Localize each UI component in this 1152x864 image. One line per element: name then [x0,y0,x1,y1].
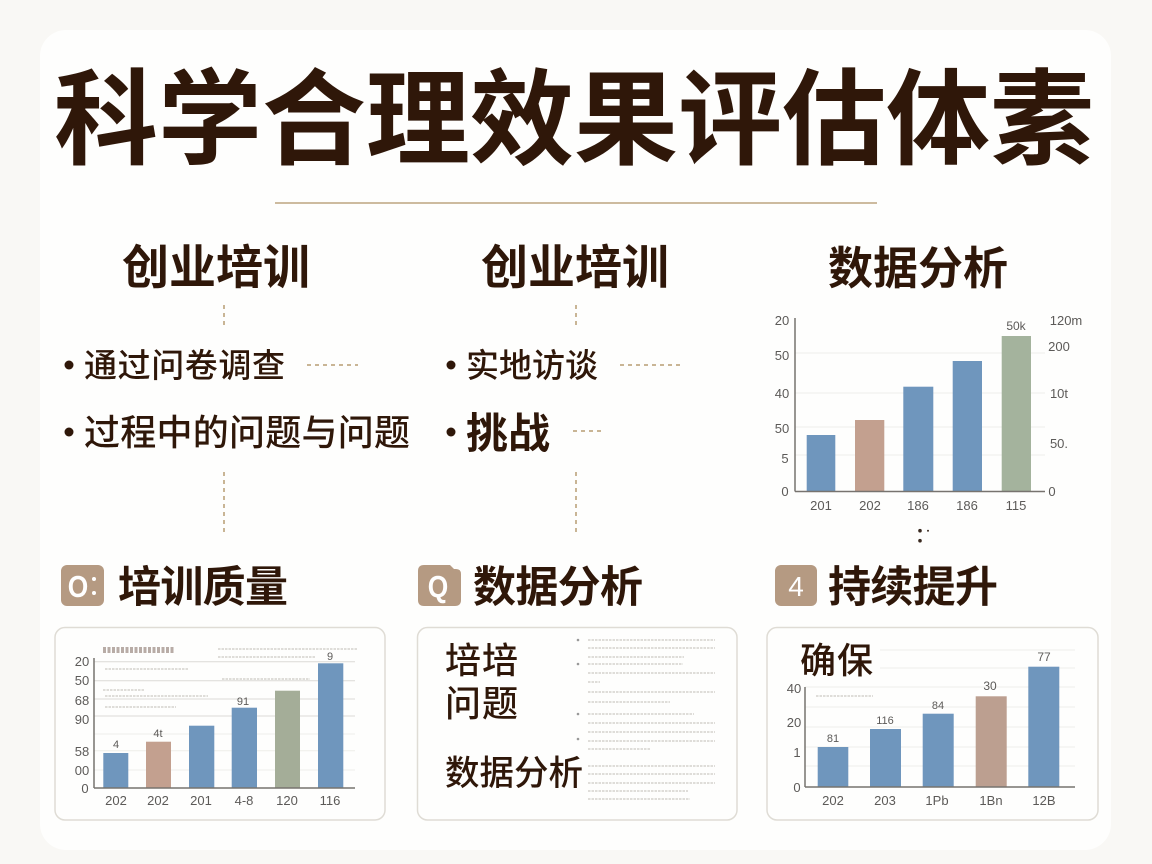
panel: training quality chart: 90 [75,712,89,727]
illegible microtext column [577,639,715,799]
panel: training quality chart: 202 [147,793,169,808]
chart: data analysis bar chart: 50 [775,348,789,363]
panel: data analysis text card: 数据分析 [445,745,583,795]
panel: data analysis text card: 问题 [445,675,518,727]
panel: training quality chart: 202 [105,793,127,808]
panel: continuous improvement chart: 确保 [800,632,873,684]
panel: training quality chart: 50 [75,673,89,688]
section heading: continuous improvement: 4 [788,571,804,602]
panel: continuous improvement chart: 1Pb [925,793,949,808]
bullet: process problems: 过程中的问题与问题 [84,404,410,456]
panel: column 2 heading: 创业培训 [481,229,669,298]
panel: continuous improvement chart: 202 [822,793,844,808]
panel: data analysis text card [418,628,737,820]
chart: data analysis bar chart: 20 [775,313,789,328]
section heading: continuous improvement: 持续提升 [828,553,998,615]
panel: training quality chart: 00 [75,763,89,778]
panel: data analysis text card: 培培 [445,632,518,684]
chart: data analysis bar chart: 50. [1050,436,1068,451]
panel: training quality chart: 4 [113,739,119,751]
bullet: challenge: 挑战 [466,400,550,461]
chart: data analysis bar chart: 40 [775,386,789,401]
section heading: data analysis: 数据分析 [473,553,643,615]
section heading: training quality: O [68,570,88,605]
chart: data analysis bar chart: 200 [1048,339,1070,354]
chart: data analysis bar chart: 120m [1050,313,1082,328]
panel: column 3 heading: 数据分析 [828,232,1008,297]
panel: column 1 heading: 创业培训 [122,229,310,298]
panel: training quality chart: 0 [81,781,89,796]
chart: data analysis bar chart: 115 [1006,498,1026,513]
panel: continuous improvement chart: 77 [1037,650,1051,664]
panel: training quality chart: 201 [190,793,212,808]
chart: data analysis bar chart: 186 [956,498,978,513]
chart: data analysis bar chart: 202 [859,498,881,513]
title: 科学合理效果评估体素 [54,35,1094,186]
section heading: training quality: 培训质量 [118,553,288,615]
panel: continuous improvement chart: 0 [793,780,801,795]
chart: data analysis bar chart: 0 [781,484,789,499]
chart: data analysis bar chart: 0 [1048,484,1056,499]
panel: continuous improvement chart: 40 [787,681,801,696]
chart: data analysis bar chart: 186 [907,498,929,513]
chart: data analysis bar chart: 201 [810,498,832,513]
panel: training quality chart: 68 [75,693,89,708]
chart: data analysis bar chart: 50k [1006,319,1027,333]
panel: training quality chart: 4-8 [235,793,253,808]
panel: continuous improvement chart: 203 [874,793,896,808]
panel: continuous improvement chart: 12B [1032,793,1056,808]
chart: data analysis bar chart: 5 [781,451,789,466]
panel: training quality chart: 9 [327,651,333,663]
panel: continuous improvement chart: 30 [983,679,997,693]
panel: training quality chart: 120 [276,793,298,808]
chart: data analysis bar chart [775,313,1082,513]
panel: continuous improvement chart [767,628,1098,820]
chart: data analysis bar chart: 10t [1050,386,1068,401]
panel: continuous improvement chart: 81 [827,733,839,745]
panel: continuous improvement chart: 116 [876,715,894,727]
panel: training quality chart: 4t [153,728,163,740]
panel: training quality chart: 20 [75,654,89,669]
panel: continuous improvement chart: 84 [932,700,944,712]
illegible microtext in chart [103,649,357,707]
section heading: data analysis: Q [428,570,448,605]
panel: training quality chart: 58 [75,744,89,759]
icon: three dots under chart [918,529,929,542]
panel: continuous improvement chart: 1 [793,745,801,760]
panel: training quality chart: 116 [320,793,340,808]
panel: training quality chart: 91 [237,696,249,708]
bullet: field interview: 实地访谈 [466,339,598,387]
bullet: questionnaire: 通过问卷调查 [84,339,285,387]
panel: training quality chart [55,628,385,820]
panel: continuous improvement chart: 20 [787,715,801,730]
chart: data analysis bar chart: 50 [775,421,789,436]
panel: continuous improvement chart: 1Bn [979,793,1003,808]
